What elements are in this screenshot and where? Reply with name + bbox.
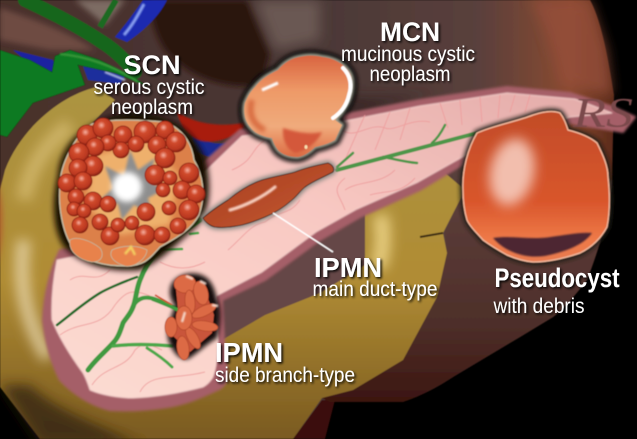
main pancreatic duct <box>57 125 477 370</box>
IPMN side branch lesion <box>152 273 220 361</box>
brown wedge below pancreas <box>222 212 365 340</box>
label: IPMN main duct-type <box>312 252 438 301</box>
label: IPMN main duct-type: IPMN <box>314 252 382 283</box>
label: SCN: SCN <box>123 50 181 80</box>
duodenum loop <box>0 87 465 439</box>
label: Pseudocyst with debris <box>493 263 620 318</box>
IPMN main duct lesion <box>203 163 334 227</box>
label: MCN: MCN <box>380 17 440 47</box>
label: MCN: mucinous cystic <box>341 43 475 66</box>
label: IPMN main duct-type: main duct-type <box>312 278 438 301</box>
green gallbladder and bile ducts <box>0 0 147 137</box>
blue veins <box>13 0 228 158</box>
pseudocyst <box>463 112 609 262</box>
label: IPMN side branch-type <box>215 337 355 387</box>
pancreas <box>43 87 635 410</box>
label: SCN <box>94 50 204 119</box>
label: MCN: neoplasm <box>370 63 450 86</box>
MCN cyst <box>244 56 352 157</box>
IPMN main duct leader <box>273 213 333 252</box>
red vessel <box>177 112 247 142</box>
label: IPMN side branch-type: side branch-type <box>215 364 355 387</box>
RS signature: RS <box>572 91 633 137</box>
label: SCN: neoplasm <box>111 96 193 119</box>
label: IPMN side branch-type: IPMN <box>215 337 283 368</box>
label: Pseudocyst with debris: with debris <box>493 295 584 318</box>
label: SCN: serous cystic <box>94 76 204 99</box>
SCN cyst cluster <box>54 113 209 270</box>
label: MCN <box>341 17 475 86</box>
